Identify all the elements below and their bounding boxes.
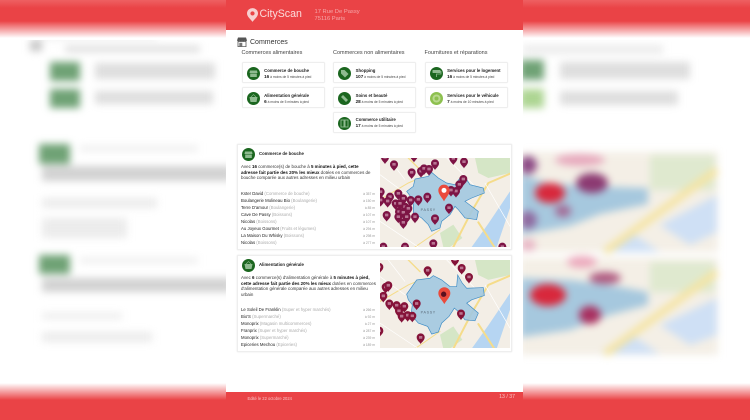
card: services véhicule: 7 à moins de 10 minutes à pied [447,99,494,104]
main page panel: à 239 m [363,336,375,340]
icon: basket [247,92,260,105]
main page panel: Boulangerie Molineau Bio (Boulangerie) [241,198,317,202]
main page panel: à 92 m [365,314,375,318]
icon: wheel [430,92,443,105]
card: soins et beauté [333,87,416,108]
blurred shapes right [523,44,722,360]
column heading: fournitures: Fournitures et réparations [424,50,487,56]
description: alimentation générale: urbain [241,292,253,296]
icon: utility [338,117,351,130]
card: soins et beauté: 28 à moins de 5 minutes à pied [356,99,403,104]
panel: commerce de bouche [237,144,512,250]
icon: tag [338,67,351,80]
address: 17 Rue De Passy [314,9,360,15]
list: alimentation générale [241,306,375,347]
icon: shop [247,67,260,80]
address [314,9,360,22]
main page panel: Monoprix (Supermarché) [241,335,289,340]
card: alimentation générale [242,87,324,108]
blurred background: left side [0,0,226,420]
blurred header band left [0,0,226,40]
card: shopping: 107 à moins de 5 minutes à pied [356,74,405,79]
section title: alimentation générale: Alimentation générale [259,262,304,267]
card: shopping: Shopping [356,68,375,73]
blurred footer band right [523,383,750,420]
description: alimentation générale: Avec 6 commerce(s) d'alimentation générale à 5 minutes à pied, [241,275,370,280]
commerce pins [377,152,506,253]
main page panel: Bio'S (Supermarché) [241,314,281,318]
commerce pins [375,256,473,344]
walking isochrone [407,172,484,231]
main page panel: à 277 m [363,241,375,245]
main page panel: à 150 m [363,198,375,202]
logo text: CityScan [260,8,302,20]
main page panel: Kster David (Commerce de bouche) [241,190,310,196]
walking isochrone [407,275,484,334]
icon: storefront [237,38,247,47]
map: commerce de bouche [380,158,510,247]
description: alimentation générale: d'alimentation générale comparée aux autres adresses en milieu [241,286,368,291]
district label: PASSY [421,208,436,212]
map: alimentation générale [380,260,510,348]
card: services logement: 16 à moins de 5 minutes à pied [447,74,494,79]
section title: commerce de bouche: Commerce de bouche [259,151,304,156]
description: commerce de bouche [241,164,370,180]
header band [226,0,523,30]
card: commerce utilitaire: 17 à moins de 5 minutes à pied [356,123,403,128]
column heading: non alimentaires: Commerces non alimentaires [333,50,405,56]
main page panel: à 357 m [363,192,375,196]
main page panel: à 107 m [363,220,375,224]
main page panel: Cave De Passy (Boissons) [241,212,292,217]
blurred background: right side [523,0,750,420]
blurred footer band left [0,383,226,420]
edit date: Edité le 22 octobre 2024 [248,396,292,401]
main page panel: à 266 m [363,308,375,312]
description: alimentation générale: cette adresse fait partie des 20% les mieux dotées en commerces [241,280,376,286]
card: alimentation générale: Alimentation générale [264,93,309,98]
main page panel: Nicolas (Boissons) [241,219,277,224]
icon: commerce de bouche [242,148,255,161]
card: soins et beauté: Soins et beauté [356,93,387,98]
heading: Commerces [237,38,288,47]
page background [226,0,523,420]
card: shopping [333,62,416,83]
list: commerce de bouche [241,190,375,245]
page number: 13 / 37 [499,394,515,400]
main page panel: à 287 m [363,329,375,333]
heading text: Commerces [250,39,288,46]
card: commerce utilitaire: Commerce utilitaire [356,117,396,122]
card: commerce de bouche: Commerce de bouche [264,68,309,73]
column heading: alimentaires: Commerces alimentaires [242,50,302,56]
address marker [438,185,450,201]
card: services véhicule [424,87,508,108]
main page panel: Le Soleil De Franklin (Super et hyper marchés) [241,306,331,312]
panel: alimentation générale [237,254,512,352]
card: commerce de bouche [242,62,324,83]
address marker [438,287,450,304]
card: services logement: Services pour le logement [447,68,501,73]
card: services véhicule: Services pour le véhicule [447,93,499,98]
main page panel: à 107 m [363,213,375,217]
card: commerce de bouche: 16 à moins de 5 minutes à pied [264,74,311,79]
main page panel: à 27 m [365,322,375,326]
icon: logo pin [247,8,258,22]
address: 75116 Paris [314,16,345,22]
icon: beauty [338,92,351,105]
main page panel: Monoprix (Magasin multicommerces) [241,321,311,326]
main page panel: Terre D'amour (Boulangerie) [241,205,295,210]
description: alimentation générale [241,275,376,296]
icon: alimentation générale [242,259,255,272]
district label: PASSY [421,310,436,314]
description: commerce de bouche: bouche comparée aux autres adresses en milieu urbain [241,175,350,180]
blurred shapes left [26,40,226,342]
main page panel: à 85 m [365,206,375,210]
main page panel: La Maison Du Whisky (Boissons) [241,233,304,238]
card: commerce utilitaire [333,112,416,132]
main page panel: Franprix (Super et hyper marchés) [241,328,307,333]
blurred header band right [523,0,750,40]
card: alimentation générale: 6 à moins de 5 minutes à pied [264,99,309,104]
icon: paint roller [430,67,443,80]
main page panel: Epiceries Mechou (Epiceries) [241,342,297,347]
main page panel: à 294 m [363,227,375,231]
description: commerce de bouche: adresse fait partie des 20% les mieux dotées en commerces de [241,170,370,174]
footer band [226,392,523,420]
main page panel: à 298 m [363,234,375,238]
main page panel: Nicolas (Boissons) [241,240,277,245]
description: commerce de bouche: Avec 16 commerce(s) de bouche à 5 minutes à pied, cette [241,164,359,169]
main page panel: Au Joyeux Gourmet (Fruits et légumes) [241,226,316,231]
card: services logement [424,62,508,83]
main page panel: à 189 m [363,343,375,347]
